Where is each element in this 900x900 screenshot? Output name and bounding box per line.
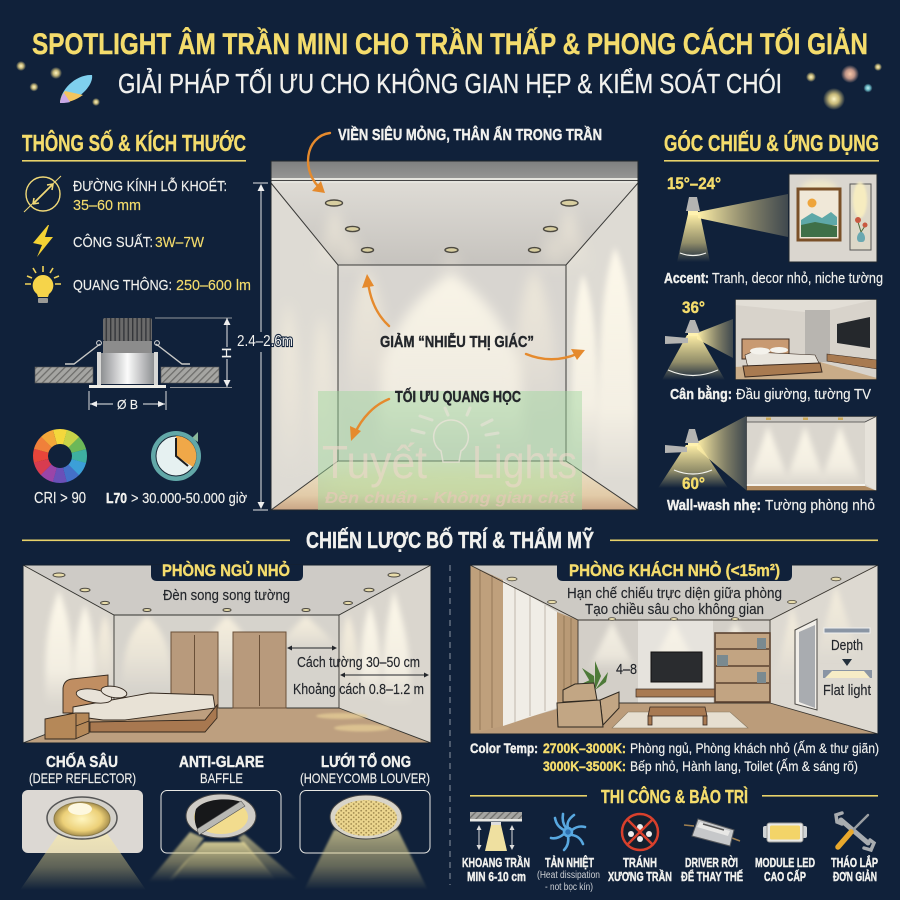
text: power: CÔNG SUẤT: — [73, 234, 153, 251]
section heading: installation and maintenance: THI CÔNG & BẢO TRÌ — [601, 786, 748, 807]
text: colour temperature: Bếp nhỏ, Hành lang, Toilet (Ấm & sáng rõ) — [630, 759, 858, 774]
shelf — [715, 633, 770, 702]
arrow: trim callout — [308, 133, 330, 193]
heading: deep reflector: (DEEP REFLECTOR) — [29, 770, 136, 786]
item: heat dissipation — [537, 814, 600, 893]
caption: balanced: Cân bằng: — [670, 385, 732, 403]
dimension: fixture spacing: Khoảng cách 0.8–1.2 m — [293, 682, 424, 698]
item: heat dissipation: - not bọc kín) — [545, 882, 593, 893]
item: easy disassembly: THÁO LẮP — [831, 855, 878, 870]
recessed lights: living room — [507, 577, 841, 620]
wardrobes — [171, 632, 286, 708]
sofa — [557, 683, 619, 727]
heading: baffle: ANTI-GLARE — [179, 754, 264, 771]
rug and table — [612, 712, 748, 728]
watermark — [318, 391, 582, 510]
icon: power bolt — [33, 225, 53, 257]
icon: light bulb — [25, 266, 61, 303]
text: colour temperature: 2700K–3000K: — [543, 741, 626, 756]
picture: painting and niche — [789, 174, 877, 262]
heading: specifications: THÔNG SỐ & KÍCH THƯỚC — [22, 129, 246, 156]
icon: depth versus flat light: Flat light — [823, 682, 872, 699]
diagram: 36 degree fixture: 36° — [682, 298, 705, 317]
icon: driver — [684, 819, 740, 846]
main room illustration — [271, 161, 638, 510]
nightstand — [45, 713, 89, 739]
icon: heat swirl — [551, 814, 585, 850]
callout: ultra-thin trim: VIỀN SIÊU MỎNG, THÂN ẨN TRONG TRẦN — [338, 125, 602, 144]
item: heat dissipation: (Heat dissipation — [537, 870, 600, 881]
height dimension — [237, 183, 293, 510]
section heading: layout strategy: CHIẾN LƯỢC BỐ TRÍ & THẨM MỸ — [306, 526, 594, 553]
plant — [581, 661, 608, 690]
item: easy disassembly — [831, 813, 878, 884]
text: cut-out diameter: ĐƯỜNG KÍNH LỖ KHOÉT: — [73, 177, 227, 195]
text: fixture count: 4–8 — [616, 661, 637, 678]
text: living room guidance: Tạo chiều sâu cho không gian — [585, 601, 764, 618]
item: avoid ceiling joists — [608, 814, 672, 884]
icon: depth versus flat light: Depth — [831, 637, 863, 654]
diagram: 60 degree fixture — [658, 416, 746, 493]
text: luminous flux: QUANG THÔNG: — [73, 277, 172, 294]
item: premium LED module: CAO CẤP — [764, 869, 806, 884]
caption: balanced: Đầu giường, tường TV — [736, 386, 871, 403]
text: CRI: CRI > 90 — [34, 490, 86, 507]
caption: wall wash: Wall-wash nhẹ: — [667, 497, 761, 514]
caption: accent: Accent: — [664, 270, 709, 287]
panel: small living room — [470, 561, 878, 734]
text: luminous flux: 250–600 lm — [176, 277, 251, 294]
arrow: optics — [350, 399, 389, 441]
arrow: visual noise right — [526, 349, 585, 360]
watermark: Đèn chuẩn - Không gian chất — [325, 489, 576, 507]
caption: wall wash — [667, 497, 875, 514]
heading: baffle — [179, 754, 264, 786]
optic: anti-glare baffle — [148, 754, 298, 882]
text: L70 lifetime: L70 — [106, 490, 127, 507]
diagram: 15-24 degree fixture: 15°–24° — [667, 174, 721, 193]
dimension: wall distance — [287, 646, 420, 671]
item: separate driver: ĐỂ THAY THẾ — [681, 869, 743, 884]
caption: balanced — [670, 385, 871, 403]
text: L70 lifetime: > 30.000-50.000 giờ — [131, 490, 247, 507]
panel: specifications — [22, 129, 251, 507]
tv console — [636, 689, 716, 697]
optic: deep reflector — [20, 751, 146, 890]
heading: baffle: BAFFLE — [200, 770, 243, 786]
diagram: 15-24 degree fixture — [667, 174, 788, 262]
heading: deep reflector — [29, 751, 136, 786]
heading: honeycomb: (HONEYCOMB LOUVER) — [300, 770, 430, 786]
recessed lights: bedroom — [53, 573, 400, 612]
diagram: 60 degree fixture: 60° — [682, 474, 705, 493]
optic: honeycomb louver — [300, 752, 430, 890]
tv — [651, 652, 702, 682]
callout: visual noise: GIẢM “NHIỄU THỊ GIÁC” — [380, 332, 534, 351]
dimension: wall distance: Cách tường 30–50 cm — [297, 655, 420, 671]
text: cut-out diameter — [73, 177, 227, 214]
room illustration: living room — [470, 565, 878, 734]
item: easy disassembly: ĐƠN GIẢN — [833, 869, 877, 884]
dimension: fixture spacing — [293, 672, 429, 698]
icon: cut-out diameter — [24, 176, 61, 212]
room illustration: bedroom — [23, 565, 431, 743]
height dimension: 2.4–2.6m — [237, 333, 293, 350]
heading: honeycomb — [300, 752, 430, 786]
text: luminous flux — [73, 277, 251, 294]
dashed divider — [449, 565, 451, 885]
text: colour temperature: 3000K–3500K: — [543, 759, 626, 774]
icon: ceiling cavity — [470, 812, 522, 851]
text: cut-out diameter: 35–60 mm — [73, 197, 141, 214]
item: premium LED module — [755, 823, 815, 884]
text: living room guidance — [567, 585, 782, 618]
watermark: Lights — [472, 436, 577, 488]
icon: colour wheel — [36, 432, 84, 480]
diagram: fixture cross-section: Ø B — [117, 397, 138, 412]
icon: prohibited joists — [622, 814, 658, 850]
item: ceiling cavity: KHOANG TRẦN — [462, 855, 530, 870]
item: premium LED module: MODULE LED — [755, 856, 815, 870]
picture: wall wash — [746, 416, 877, 491]
recessed lights — [326, 200, 578, 252]
caption: wall wash: Tường phòng nhỏ — [765, 497, 875, 514]
text: colour temperature: Color Temp: — [470, 741, 538, 756]
decoration: left sparkles and colour leaf — [16, 61, 100, 106]
text: parallel to wall: Đèn song song tường — [163, 587, 290, 604]
item: separate driver — [681, 819, 743, 884]
diagram: 36 degree fixture — [662, 298, 733, 380]
heading tab: small living room: PHÒNG KHÁCH NHỎ (<15m²) — [569, 561, 780, 580]
text: power: 3W–7W — [155, 234, 205, 251]
item: avoid ceiling joists: XƯƠNG TRẦN — [608, 869, 672, 884]
text: colour temperature: Phòng ngủ, Phòng khách nhỏ (Ấm & thư giãn) — [630, 741, 879, 756]
panel: small bedroom — [23, 561, 431, 743]
watermark: Tuyết — [322, 436, 427, 488]
door — [795, 619, 817, 710]
callout: optics: TỐI ƯU QUANG HỌC — [395, 386, 521, 406]
item: heat dissipation: TẢN NHIỆT — [545, 855, 594, 870]
icon: depth versus flat light — [823, 628, 872, 699]
text: power — [73, 234, 205, 251]
arrow: visual noise left — [362, 274, 389, 326]
diagram: fixture cross-section — [35, 318, 234, 412]
heading: honeycomb: LƯỚI TỔ ONG — [321, 752, 411, 771]
decoration: right sparkles — [806, 63, 882, 110]
header: title and subtitle — [32, 27, 868, 99]
heading: deep reflector: CHỐA SÂU — [46, 751, 118, 771]
item: separate driver: DRIVER RỜI — [685, 855, 738, 870]
heading tab: small bedroom: PHÒNG NGỦ NHỎ — [162, 561, 290, 580]
picture: bedroom with tv — [735, 299, 877, 380]
ceiling beams — [322, 216, 582, 264]
icon: wrench and screwdriver — [836, 813, 874, 850]
text: living room guidance: Hạn chế chiếu trực diện giữa phòng — [567, 585, 782, 602]
icon: lifetime clock — [151, 431, 201, 481]
wall washes — [282, 272, 552, 418]
item: ceiling cavity — [462, 812, 530, 884]
panel: beam angles — [658, 129, 883, 514]
item: ceiling cavity: MIN 6-10 cm — [467, 870, 526, 884]
item: avoid ceiling joists: TRÁNH — [623, 855, 657, 870]
icon: LED module — [763, 823, 807, 842]
text: colour temperature — [470, 741, 879, 774]
bed — [63, 675, 217, 732]
diagram: fixture cross-section: H — [219, 348, 234, 358]
